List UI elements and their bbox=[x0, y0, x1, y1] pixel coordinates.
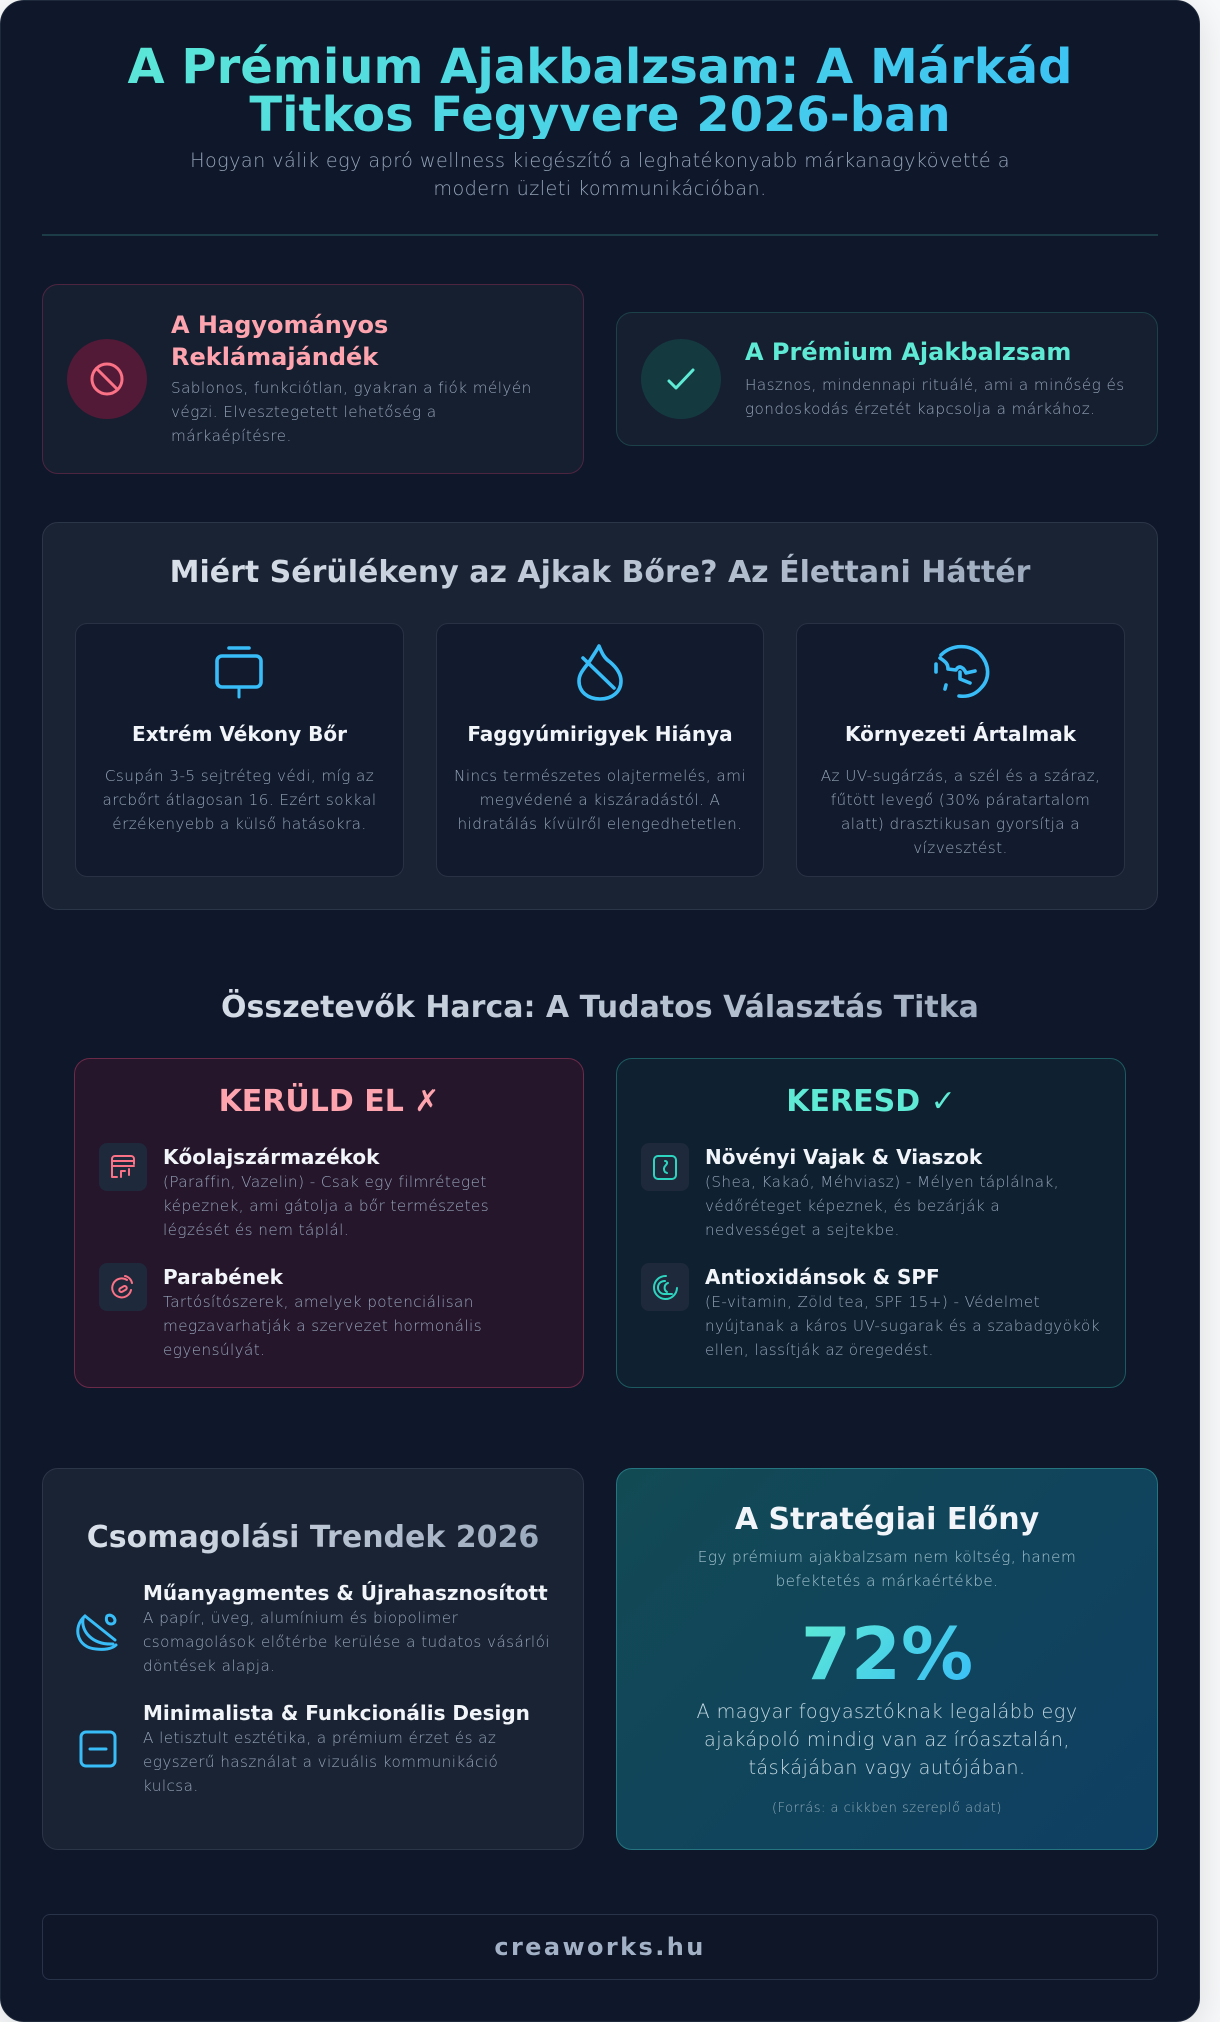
description bbox=[821, 767, 1100, 857]
icon: prohibited bbox=[67, 339, 147, 419]
panel: strategic advantage bbox=[616, 1468, 1158, 1850]
item description: megzavarhatják a szervezet hormonális bbox=[163, 1317, 482, 1335]
description: Sablonos, funkciótlan, gyakran a fiók mélyén bbox=[171, 379, 532, 397]
description: vízvesztést. bbox=[913, 839, 1008, 857]
description bbox=[454, 767, 746, 833]
description: Nincs természetes olajtermelés, ami bbox=[454, 767, 746, 785]
description: végzi. Elvesztegetett lehetőség a bbox=[171, 403, 437, 421]
item description: egyensúlyát. bbox=[163, 1341, 265, 1359]
icon: plant butters bbox=[641, 1143, 689, 1191]
item description: A letisztult esztétika, a prémium érzet és az bbox=[143, 1729, 496, 1747]
source: (Forrás: a cikkben szereplő adat) bbox=[772, 1801, 1002, 1816]
item heading: Kőolajszármazékok bbox=[163, 1145, 379, 1169]
footer brand: creaworks.hu bbox=[494, 1933, 706, 1961]
description bbox=[171, 379, 532, 445]
item heading: Parabének bbox=[163, 1265, 283, 1289]
icon: petroleum bbox=[99, 1143, 147, 1191]
section heading: ingredients: Összetevők Harca: A Tudatos Választás Titka bbox=[221, 990, 979, 1025]
heading: seek: KERESD ✓ bbox=[786, 1084, 956, 1119]
section heading: packaging: Csomagolási Trendek 2026 bbox=[87, 1520, 539, 1555]
description: Csupán 3-5 sejtréteg védi, míg az bbox=[105, 767, 374, 785]
statistic description bbox=[696, 1700, 1078, 1779]
section heading: ingredients bbox=[42, 988, 1158, 1028]
description: Hasznos, mindennapi rituálé, ami a minőség és bbox=[745, 376, 1125, 394]
item description: (Shea, Kakaó, Méhviasz) - Mélyen táplálnak, bbox=[705, 1173, 1059, 1191]
statistic description: ajakápoló mindig van az íróasztalán, bbox=[704, 1728, 1070, 1751]
item description: nedvességet a sejtekbe. bbox=[705, 1221, 900, 1239]
heading: A Hagyományos bbox=[171, 311, 388, 339]
card: environment bbox=[796, 623, 1125, 877]
description: megvédené a kiszáradástól. A bbox=[480, 791, 720, 809]
description: gondoskodás érzetét kapcsolja a márkához. bbox=[745, 400, 1095, 418]
icon: crossed drop bbox=[577, 644, 623, 701]
intro text: befektetés a márkaértékbe. bbox=[776, 1572, 998, 1590]
item description: (E-vitamin, Zöld tea, SPF 15+) - Védelmet bbox=[705, 1293, 1040, 1311]
subtitle bbox=[190, 149, 1010, 200]
icon: antioxidants bbox=[641, 1263, 689, 1311]
section heading: physiology: Miért Sérülékeny az Ajkak Bőre? Az Élettani Háttér bbox=[170, 555, 1030, 590]
card: thin skin bbox=[75, 623, 404, 877]
icon: minimal box bbox=[80, 1730, 116, 1768]
subtitle: modern üzleti kommunikációban. bbox=[433, 177, 767, 200]
panel: packaging trends bbox=[42, 1468, 584, 1850]
icon: check bbox=[641, 339, 721, 419]
description: Az UV-sugárzás, a szél és a száraz, bbox=[821, 767, 1100, 785]
item description: nyújtanak a káros UV-sugarak és a szabadgyökök bbox=[705, 1317, 1100, 1335]
heading bbox=[171, 311, 388, 371]
card: sebaceous bbox=[436, 623, 764, 877]
item description bbox=[705, 1293, 1100, 1359]
item description: légzését és nem táplál. bbox=[163, 1221, 349, 1239]
item description bbox=[163, 1293, 482, 1359]
item description bbox=[163, 1173, 489, 1239]
description bbox=[745, 376, 1125, 418]
item description: csomagolások előtérbe kerülése a tudatos vásárlói bbox=[143, 1633, 550, 1651]
title: A Prémium Ajakbalzsam: A Márkád bbox=[128, 39, 1072, 95]
item description bbox=[705, 1173, 1059, 1239]
intro text bbox=[698, 1548, 1076, 1590]
item description: (Paraffin, Vazelin) - Csak egy filmréteget bbox=[163, 1173, 487, 1191]
description bbox=[102, 767, 376, 833]
section heading: physiology bbox=[42, 553, 1158, 593]
panel: avoid bbox=[74, 1058, 584, 1388]
icon: cracked globe bbox=[934, 644, 990, 698]
item heading: Antioxidánsok & SPF bbox=[705, 1265, 940, 1289]
title bbox=[40, 43, 1160, 139]
item heading: Minimalista & Funkcionális Design bbox=[143, 1701, 530, 1725]
item description: döntések alapja. bbox=[143, 1657, 275, 1675]
statistic description: táskájában vagy autójában. bbox=[748, 1756, 1026, 1779]
item description bbox=[143, 1729, 498, 1795]
item description: Tartósítószerek, amelyek potenciálisan bbox=[163, 1293, 474, 1311]
heading: avoid: KERÜLD EL ✗ bbox=[219, 1084, 439, 1119]
item heading: Növényi Vajak & Viaszok bbox=[705, 1145, 982, 1169]
heading: Extrém Vékony Bőr bbox=[132, 722, 347, 746]
item description: kulcsa. bbox=[143, 1777, 199, 1795]
panel: premium lip balm bbox=[616, 312, 1158, 446]
item description: képeznek, ami gátolja a bőr természetes bbox=[163, 1197, 489, 1215]
title: Titkos Fegyvere 2026-ban bbox=[249, 87, 951, 143]
icon: thin skin bbox=[215, 646, 263, 698]
item description bbox=[143, 1609, 550, 1675]
icon: parabens bbox=[99, 1263, 147, 1311]
subtitle: Hogyan válik egy apró wellness kiegészítő a leghatékonyabb márkanagykövetté a bbox=[190, 149, 1010, 172]
statistic: 72% bbox=[801, 1612, 973, 1696]
item description: A papír, üveg, alumínium és biopolimer bbox=[143, 1609, 458, 1627]
item description: védőréteget képeznek, és bezárják a bbox=[705, 1197, 1000, 1215]
panel: physiology bbox=[42, 522, 1158, 910]
heading: Reklámajándék bbox=[171, 343, 378, 371]
description: fűtött levegő (30% páratartalom bbox=[831, 791, 1090, 809]
intro text: Egy prémium ajakbalzsam nem költség, hanem bbox=[698, 1548, 1076, 1566]
heading: A Prémium Ajakbalzsam bbox=[745, 338, 1071, 366]
panel: traditional gift bbox=[42, 284, 584, 474]
item description: egyszerű használat a vizuális kommunikáció bbox=[143, 1753, 498, 1771]
statistic description: A magyar fogyasztóknak legalább egy bbox=[696, 1700, 1078, 1723]
icon: eco packaging bbox=[76, 1614, 118, 1651]
description: hidratálás kívülről elengedhetetlen. bbox=[457, 815, 742, 833]
footer bbox=[42, 1914, 1158, 1980]
heading: A Stratégiai Előny bbox=[735, 1502, 1039, 1537]
description: érzékenyebb a külső hatásokra. bbox=[112, 815, 367, 833]
description: arcbőrt átlagosan 16. Ezért sokkal bbox=[102, 791, 376, 809]
heading: Faggyúmirigyek Hiánya bbox=[467, 722, 733, 746]
item description: ellen, lassítják az öregedést. bbox=[705, 1341, 934, 1359]
heading: Környezeti Ártalmak bbox=[845, 722, 1076, 746]
description: márkaépítésre. bbox=[171, 427, 292, 445]
description: alatt) drasztikusan gyorsítja a bbox=[841, 815, 1080, 833]
item heading: Műanyagmentes & Újrahasznosított bbox=[143, 1581, 548, 1605]
panel: seek bbox=[616, 1058, 1126, 1388]
